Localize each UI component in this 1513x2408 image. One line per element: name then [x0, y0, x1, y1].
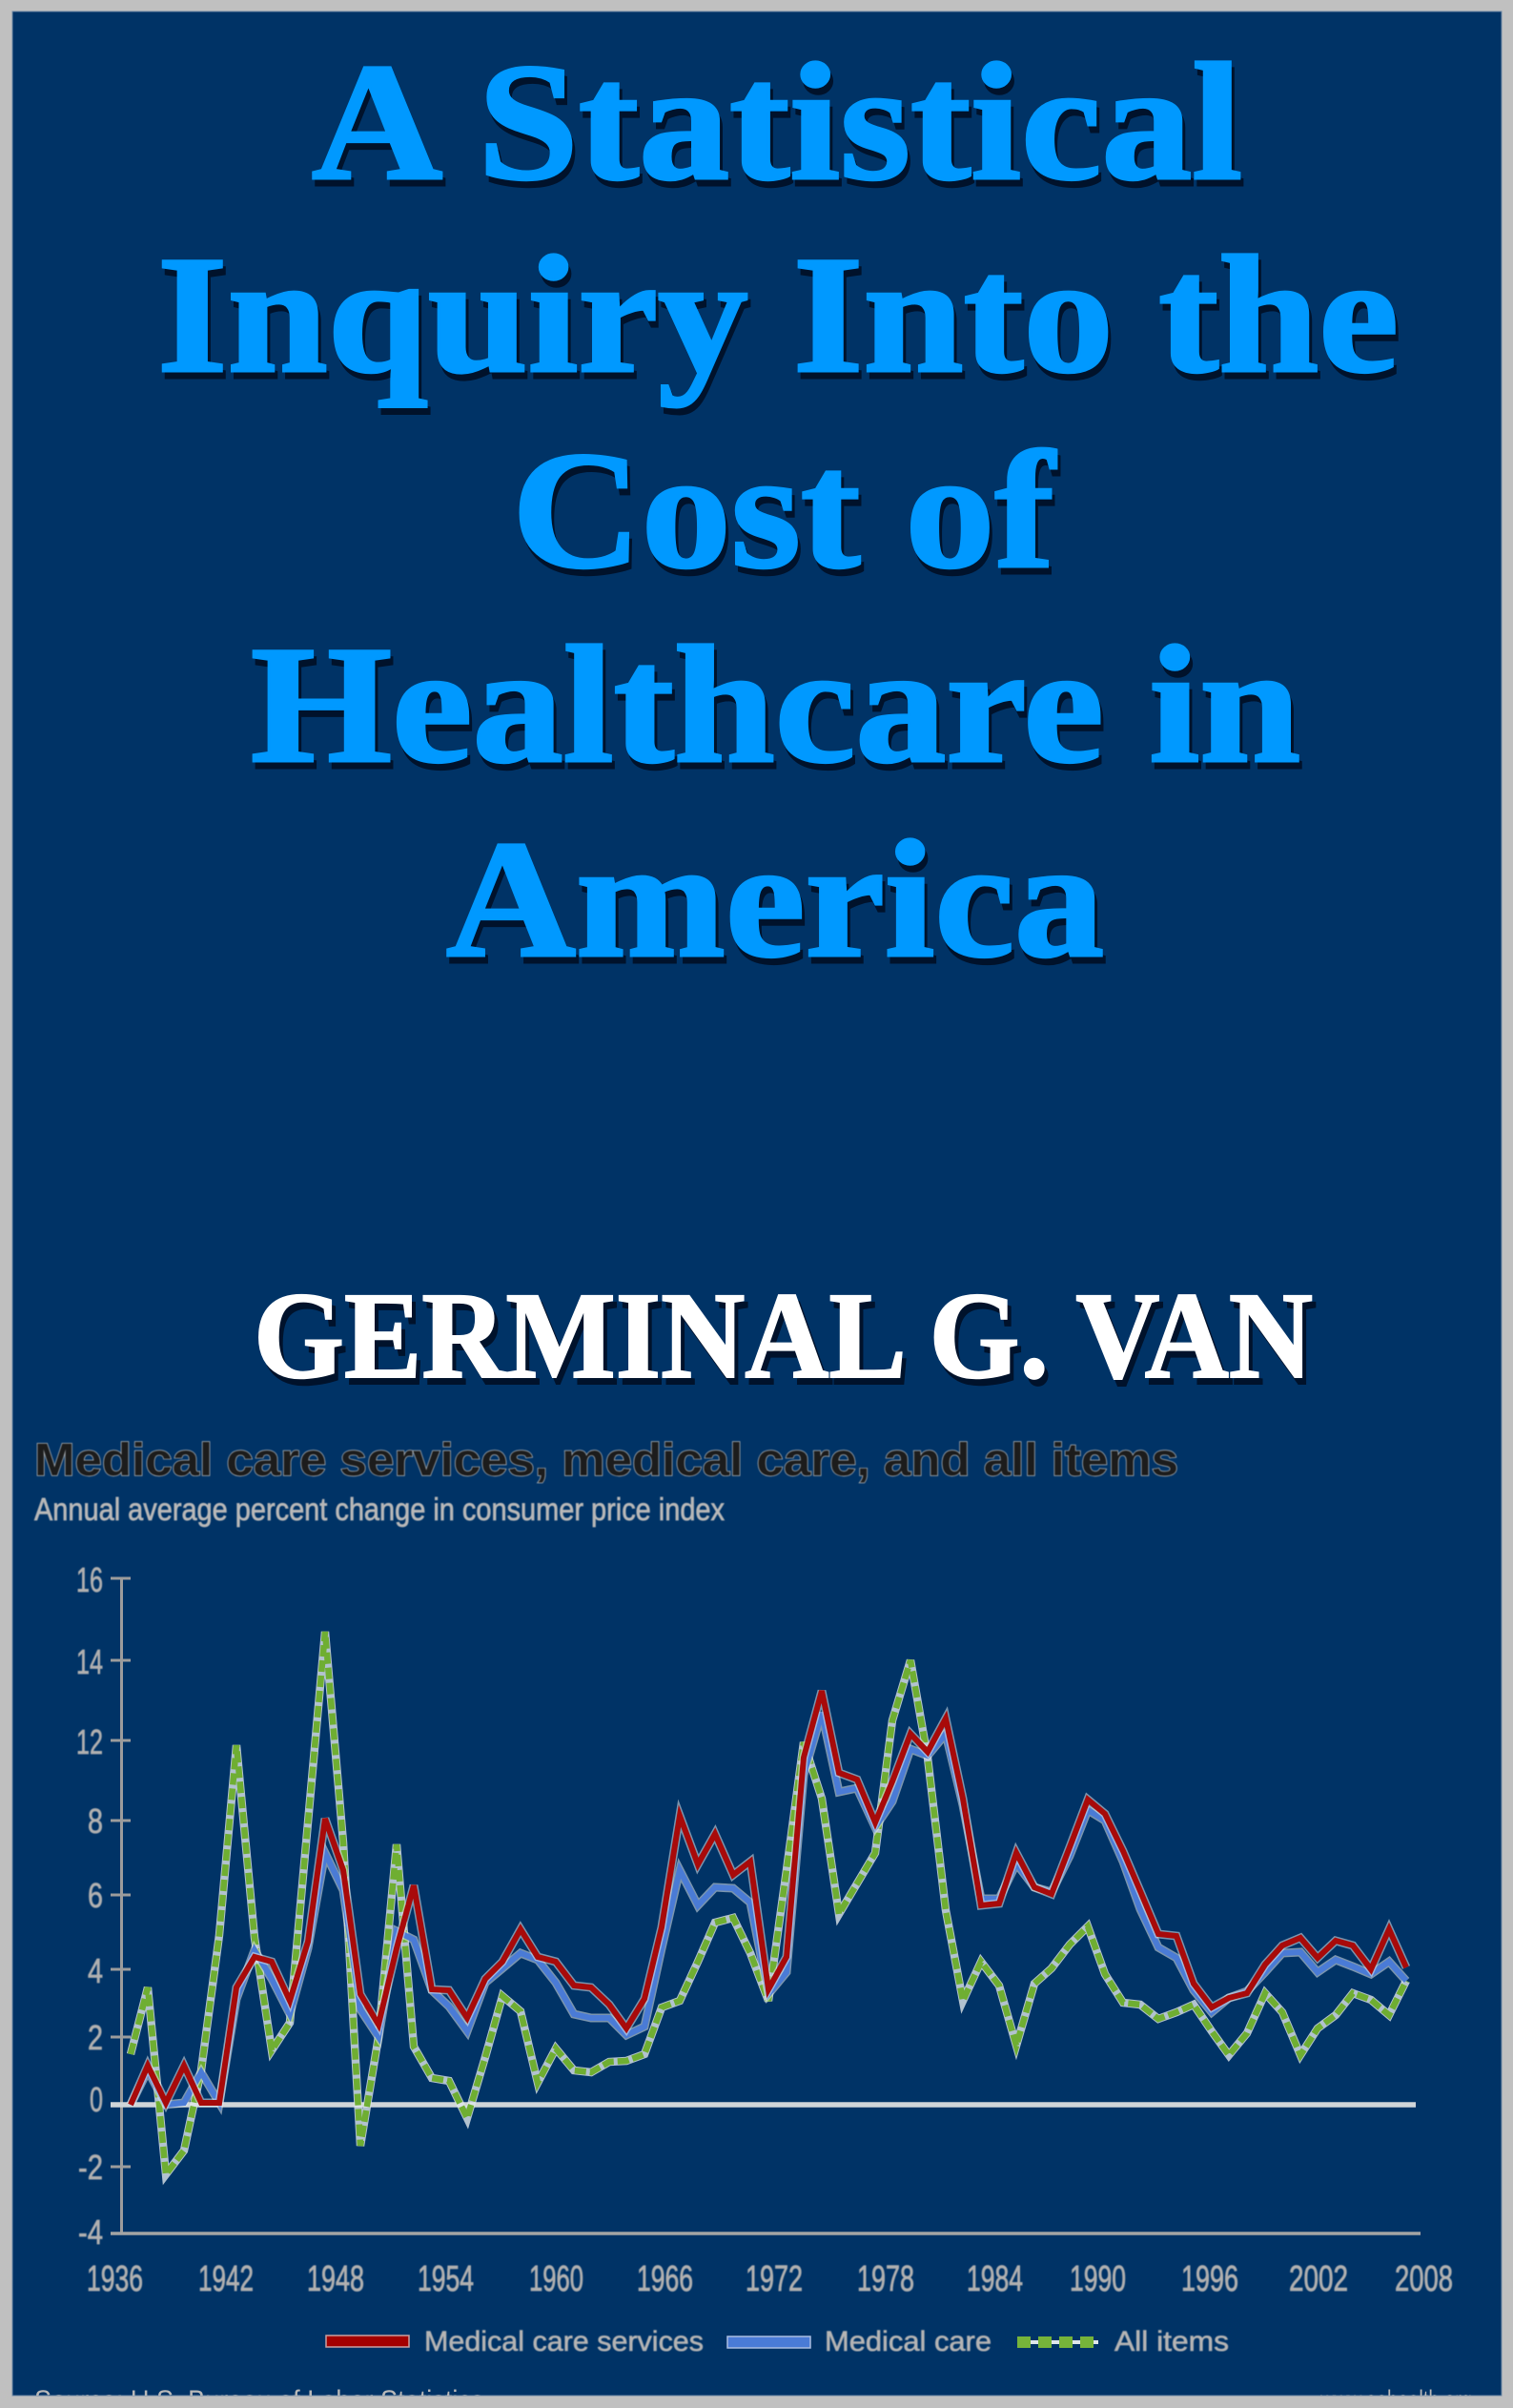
line: medical care services (red) — [131, 1691, 1406, 2105]
author name: GERMINAL G. VAN — [254, 1267, 1313, 1405]
y axis labels: 0 — [90, 2080, 103, 2119]
y axis labels: 8 — [88, 1801, 103, 1841]
y axis labels: 2 — [88, 2018, 103, 2057]
x axis labels: 1978 — [857, 2259, 914, 2299]
title: Cost of — [512, 418, 1057, 604]
x axis labels: 1948 — [307, 2259, 364, 2299]
x axis — [111, 2232, 1421, 2235]
x axis labels: 1960 — [529, 2259, 583, 2299]
chart subtitle: Annual average percent change in consumer price index — [34, 1492, 725, 1527]
line: medical care (blue) — [131, 1713, 1406, 2105]
zero line — [111, 2102, 1416, 2108]
y axis labels: 16 — [76, 1560, 103, 1599]
title: A Statistical — [312, 30, 1242, 216]
title: America — [446, 807, 1104, 993]
chart title: Medical care services, medical care, and all items — [34, 1435, 1178, 1486]
x axis labels: 1954 — [418, 2259, 474, 2299]
y axis labels: 6 — [88, 1876, 103, 1915]
x axis labels: 1936 — [87, 2259, 143, 2299]
line: all items (green dashed) — [131, 1632, 1406, 2174]
y axis labels: 14 — [76, 1642, 103, 1681]
y axis labels: 12 — [76, 1722, 103, 1761]
legend — [326, 2326, 1229, 2357]
x axis labels: 2002 — [1289, 2259, 1348, 2299]
x axis labels — [87, 2259, 1453, 2299]
x axis labels: 1996 — [1181, 2259, 1238, 2299]
y axis with ticks — [111, 1578, 131, 2233]
source line (cropped at panel edge) — [36, 2390, 1471, 2396]
legend: medical care services: Medical care services — [424, 2326, 704, 2357]
title — [157, 30, 1399, 993]
y axis labels: -4 — [78, 2212, 103, 2252]
x axis labels: 1990 — [1070, 2259, 1126, 2299]
x axis labels: 2008 — [1395, 2259, 1453, 2299]
legend: medical care — [727, 2326, 992, 2357]
title: Inquiry Into the — [157, 222, 1399, 408]
x axis labels: 1984 — [967, 2259, 1023, 2299]
title: Healthcare in — [251, 612, 1300, 798]
x axis labels: 1972 — [746, 2259, 803, 2299]
y axis labels: 4 — [88, 1951, 103, 1990]
y axis labels: -2 — [78, 2148, 103, 2187]
y axis labels — [76, 1560, 103, 2252]
x axis labels: 1942 — [198, 2259, 254, 2299]
x axis labels: 1966 — [637, 2259, 693, 2299]
legend: medical care: Medical care — [825, 2326, 992, 2357]
legend: all items: All items — [1114, 2326, 1229, 2357]
chart: medical care price changes — [34, 1435, 1472, 2408]
